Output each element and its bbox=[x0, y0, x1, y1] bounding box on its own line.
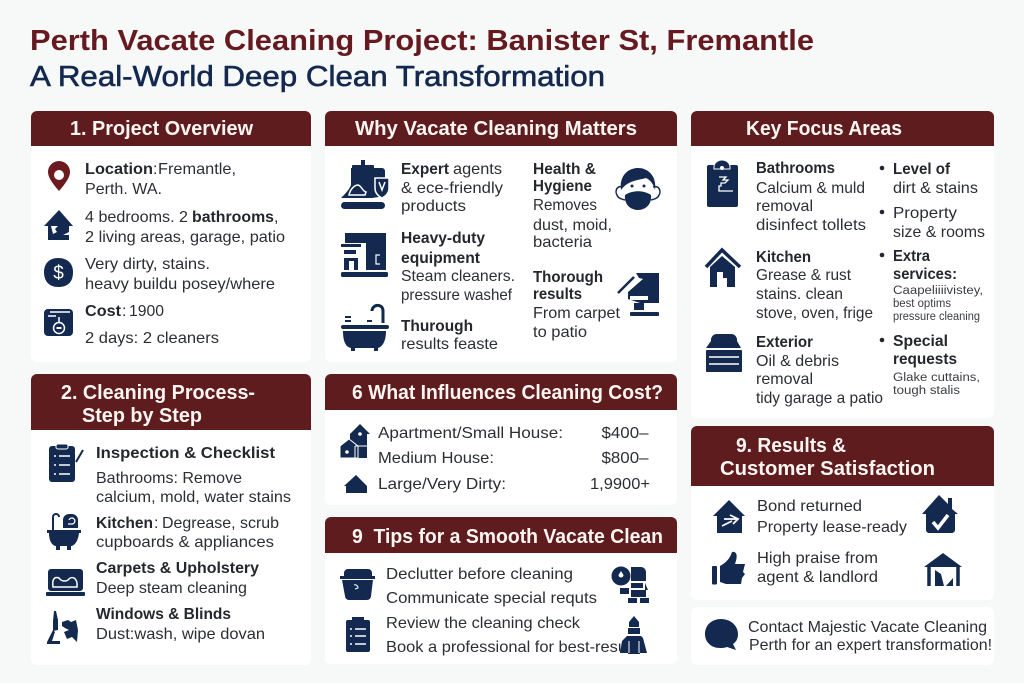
list: level of dirt: Level of bbox=[893, 161, 951, 178]
text: location: Fremantle, bbox=[158, 161, 236, 178]
icon: house with check bbox=[922, 495, 958, 533]
text: kitchen bbox=[756, 249, 873, 322]
icon: house with arrow bbox=[713, 500, 745, 533]
heading: cleaning cost bbox=[325, 374, 677, 410]
text: health and hygiene: Removes bbox=[533, 197, 597, 214]
text: thurough results: results feaste bbox=[401, 336, 498, 353]
list: level of dirt: dirt & stains bbox=[893, 180, 978, 197]
heading: key focus areas bbox=[691, 111, 994, 146]
text: tips bottom: Book a professional for best-resu bbox=[386, 639, 627, 656]
text: rooms: 4 bedrooms. 2 bbox=[85, 209, 188, 226]
heading: why vacate cleaning matters: Why Vacate Cleaning Matters bbox=[355, 118, 637, 140]
text: expert agents bbox=[401, 161, 503, 215]
heading: results: 9. Results & bbox=[736, 435, 846, 457]
text: cost and duration: 1900 bbox=[129, 303, 164, 320]
text: bond returned: Bond returned bbox=[757, 498, 862, 515]
text: kitchen: stains. clean bbox=[756, 286, 843, 303]
panel: why vacate cleaning matters bbox=[325, 111, 677, 362]
text: high praise: agent & landlord bbox=[757, 569, 878, 586]
text: heavy-duty equipment: Steam cleaners. bbox=[401, 268, 515, 285]
text: thorough results bbox=[533, 269, 621, 341]
text: bathrooms: Calcium & muld bbox=[756, 180, 865, 197]
icon: garage house bbox=[924, 553, 962, 586]
text: rooms: bathrooms bbox=[192, 209, 274, 226]
list: extra services: Caapeliiiivistey, bbox=[893, 285, 983, 297]
list: extra services: pressure cleaning bbox=[893, 311, 980, 323]
text: tips bottom: Review the cleaning check bbox=[386, 615, 581, 632]
list: special requests: requests bbox=[893, 351, 957, 368]
text: kitchen: Kitchen bbox=[756, 249, 811, 266]
panel: results bbox=[691, 426, 994, 600]
heading: why vacate cleaning matters bbox=[325, 111, 677, 146]
icon: dollar bbox=[44, 258, 73, 287]
heading: results bbox=[691, 426, 994, 486]
heading: cleaning process: 2. Cleaning Process- bbox=[61, 382, 255, 404]
icon: agent products bbox=[341, 160, 389, 209]
list: level of dirt bbox=[880, 161, 978, 197]
text: bond returned bbox=[757, 498, 907, 536]
text: inspection: Bathrooms: Remove bbox=[96, 470, 242, 487]
text: large house price: Large/Very Dirty: bbox=[378, 476, 506, 493]
text: apartment price: Apartment/Small House: bbox=[378, 425, 563, 442]
panel: key focus areas bbox=[691, 111, 994, 418]
text: rooms bbox=[85, 209, 285, 246]
heading: project overview bbox=[31, 111, 311, 146]
text: windows: Windows & Blinds bbox=[96, 606, 231, 623]
text: expert agents: Expert bbox=[401, 161, 450, 178]
text: high praise bbox=[757, 550, 878, 586]
icon: dollar: $ bbox=[53, 263, 64, 284]
list: property size bbox=[880, 205, 985, 241]
text: kitchen: Grease & rust bbox=[756, 267, 852, 284]
panel: tips bbox=[325, 517, 677, 664]
text: location: : bbox=[153, 161, 157, 178]
text: heavy-duty equipment bbox=[401, 230, 515, 304]
icon: bathtub bbox=[47, 514, 81, 550]
panel: contact callout bbox=[691, 607, 994, 665]
text: tips top: Communicate special requts bbox=[386, 590, 597, 607]
text: inspection: calcium, mold, water stains bbox=[96, 489, 291, 506]
panel: project overview bbox=[31, 111, 311, 362]
text: windows bbox=[96, 606, 265, 643]
text: contact call to action: Perth for an expert transformation! bbox=[749, 637, 992, 654]
text: heavy-duty equipment: equipment bbox=[401, 250, 481, 267]
text: inspection bbox=[96, 445, 291, 506]
text: exterior: Exterior bbox=[756, 334, 813, 351]
icon: garage bbox=[706, 334, 742, 372]
icon: coffee machine equipment bbox=[341, 233, 388, 277]
text: location: Perth. WA. bbox=[85, 181, 162, 198]
text: thorough results: to patio bbox=[533, 324, 587, 341]
text: thorough results: results bbox=[533, 286, 582, 303]
text: condition: heavy buildu posey/where bbox=[85, 276, 275, 293]
icon: floor machine bbox=[618, 273, 659, 316]
text: kitchen: Degrease, scrub bbox=[162, 515, 279, 532]
icon: laptop carpet bbox=[46, 569, 85, 596]
text: large house price bbox=[378, 476, 650, 493]
text: inspection: Inspection & Checklist bbox=[96, 445, 276, 462]
text: location: Location bbox=[85, 161, 153, 178]
text: bathrooms: Bathrooms bbox=[756, 160, 835, 177]
icon: jug bbox=[44, 309, 73, 336]
list: special requests bbox=[880, 333, 980, 397]
text: exterior: removal bbox=[756, 371, 813, 388]
list: special requests: tough stalis bbox=[893, 385, 960, 397]
text: expert agents: & ece-friendly bbox=[401, 180, 503, 197]
text: rooms: , bbox=[274, 209, 278, 226]
text: thurough results: Thurough bbox=[401, 318, 473, 335]
icon: tip clipboard bbox=[346, 617, 370, 652]
text: kitchen: : bbox=[154, 515, 158, 532]
text: bathrooms: removal bbox=[756, 198, 813, 215]
text: health and hygiene: bacteria bbox=[533, 234, 592, 251]
text: health and hygiene: dust, moid, bbox=[533, 217, 612, 234]
icon: face mask bbox=[616, 168, 660, 210]
list: special requests: Special bbox=[893, 333, 948, 350]
panel: cleaning process bbox=[31, 374, 311, 665]
text: thurough results bbox=[401, 318, 498, 353]
text: kitchen bbox=[96, 515, 279, 551]
text: heavy-duty equipment: pressure washef bbox=[401, 287, 513, 304]
icon: speech bubble bbox=[705, 619, 738, 650]
text: carpets bbox=[96, 560, 259, 597]
icon: droplet and supplies bbox=[612, 566, 649, 603]
list: extra services bbox=[880, 248, 983, 323]
text: windows: Dust:wash, wipe dovan bbox=[96, 626, 265, 643]
text: exterior: tidy garage a patio bbox=[756, 390, 883, 407]
text: carpets: Deep steam cleaning bbox=[96, 580, 247, 597]
text: kitchen: Kitchen bbox=[96, 515, 153, 532]
icon: vacuum bbox=[47, 611, 78, 644]
text: medium house price bbox=[378, 450, 649, 467]
title: Perth Vacate Cleaning Project: Banister St, Fremantle bbox=[30, 25, 814, 57]
icon: large house bbox=[344, 475, 367, 493]
text: health and hygiene: Hygiene bbox=[533, 178, 592, 195]
text: cost and duration: 2 days: 2 cleaners bbox=[85, 330, 219, 347]
heading: project overview: 1. Project Overview bbox=[70, 118, 253, 140]
text: exterior: Oil & debris bbox=[756, 353, 839, 370]
text: expert agents: products bbox=[401, 198, 466, 215]
text: cost and duration: Cost bbox=[85, 303, 122, 320]
text: rooms: 2 living areas, garage, patio bbox=[85, 229, 285, 246]
icon: storage bin bbox=[340, 569, 375, 600]
list: extra services: Extra bbox=[893, 248, 930, 265]
text: expert agents: agents bbox=[453, 161, 502, 178]
text: cost and duration bbox=[85, 303, 219, 347]
text: location bbox=[85, 161, 236, 198]
panel: cleaning cost bbox=[325, 374, 677, 505]
heading: tips: 9 Tips for a Smooth Vacate Clean bbox=[352, 526, 663, 548]
icon: house bbox=[44, 210, 73, 240]
text: bathrooms bbox=[756, 160, 866, 234]
text: kitchen: cupboards & appliances bbox=[96, 534, 274, 551]
text: bond returned: Property lease-ready bbox=[757, 519, 907, 536]
heading: results: Customer Satisfaction bbox=[720, 458, 935, 480]
icon: location pin bbox=[48, 161, 70, 191]
icon: cleaner person bbox=[620, 616, 647, 654]
icon: kitchen house bbox=[706, 250, 740, 287]
text: heavy-duty equipment: Heavy-duty bbox=[401, 230, 485, 247]
title: A Real-World Deep Clean Transformation bbox=[30, 61, 605, 93]
text: medium house price: Medium House: bbox=[378, 450, 494, 467]
text: bathrooms: disinfect tollets bbox=[756, 217, 866, 234]
text: thorough results: From carpet bbox=[533, 305, 621, 322]
text: condition bbox=[85, 256, 275, 293]
text: health and hygiene: Health & bbox=[533, 161, 596, 178]
icon: checklist bbox=[49, 444, 83, 482]
text: exterior bbox=[756, 334, 883, 407]
text: tips bottom bbox=[386, 615, 627, 656]
icon: bathroom clipboard bbox=[707, 160, 738, 207]
list: extra services: services: bbox=[893, 266, 957, 283]
text: apartment price: $400– bbox=[602, 425, 649, 442]
list: property size: Property bbox=[893, 205, 957, 222]
text: cost and duration: : bbox=[122, 303, 126, 320]
heading: cleaning process: Step by Step bbox=[82, 405, 202, 427]
icon: bathtub bbox=[341, 305, 389, 351]
text: condition: Very dirty, stains. bbox=[85, 256, 210, 273]
list: special requests: Glake cuttains, bbox=[893, 372, 980, 384]
text: tips top bbox=[386, 566, 597, 607]
heading: tips bbox=[325, 517, 677, 553]
text: kitchen: stove, oven, frige bbox=[756, 305, 873, 322]
text: thorough results: Thorough bbox=[533, 269, 603, 286]
text: medium house price: $800– bbox=[602, 450, 649, 467]
title bbox=[30, 25, 814, 93]
text: high praise: High praise from bbox=[757, 550, 878, 567]
text: contact call to action: Contact Majestic Vacate Cleaning bbox=[748, 619, 987, 636]
heading: cleaning cost: 6 What Influences Cleaning Cost? bbox=[352, 382, 663, 404]
list: extra services: best optims bbox=[893, 298, 951, 310]
list: property size: size & rooms bbox=[893, 224, 985, 241]
text: health and hygiene bbox=[533, 161, 612, 251]
text: apartment price bbox=[378, 425, 649, 442]
text: carpets: Carpets & Upholstery bbox=[96, 560, 259, 577]
icon: small and medium houses bbox=[340, 424, 370, 458]
text: contact call to action bbox=[748, 619, 992, 654]
text: tips top: Declutter before cleaning bbox=[386, 566, 573, 583]
heading: key focus areas: Key Focus Areas bbox=[746, 118, 902, 140]
text: large house price: 1,9900+ bbox=[590, 476, 650, 493]
icon: thumbs up bbox=[712, 552, 745, 584]
heading: cleaning process bbox=[31, 374, 311, 430]
